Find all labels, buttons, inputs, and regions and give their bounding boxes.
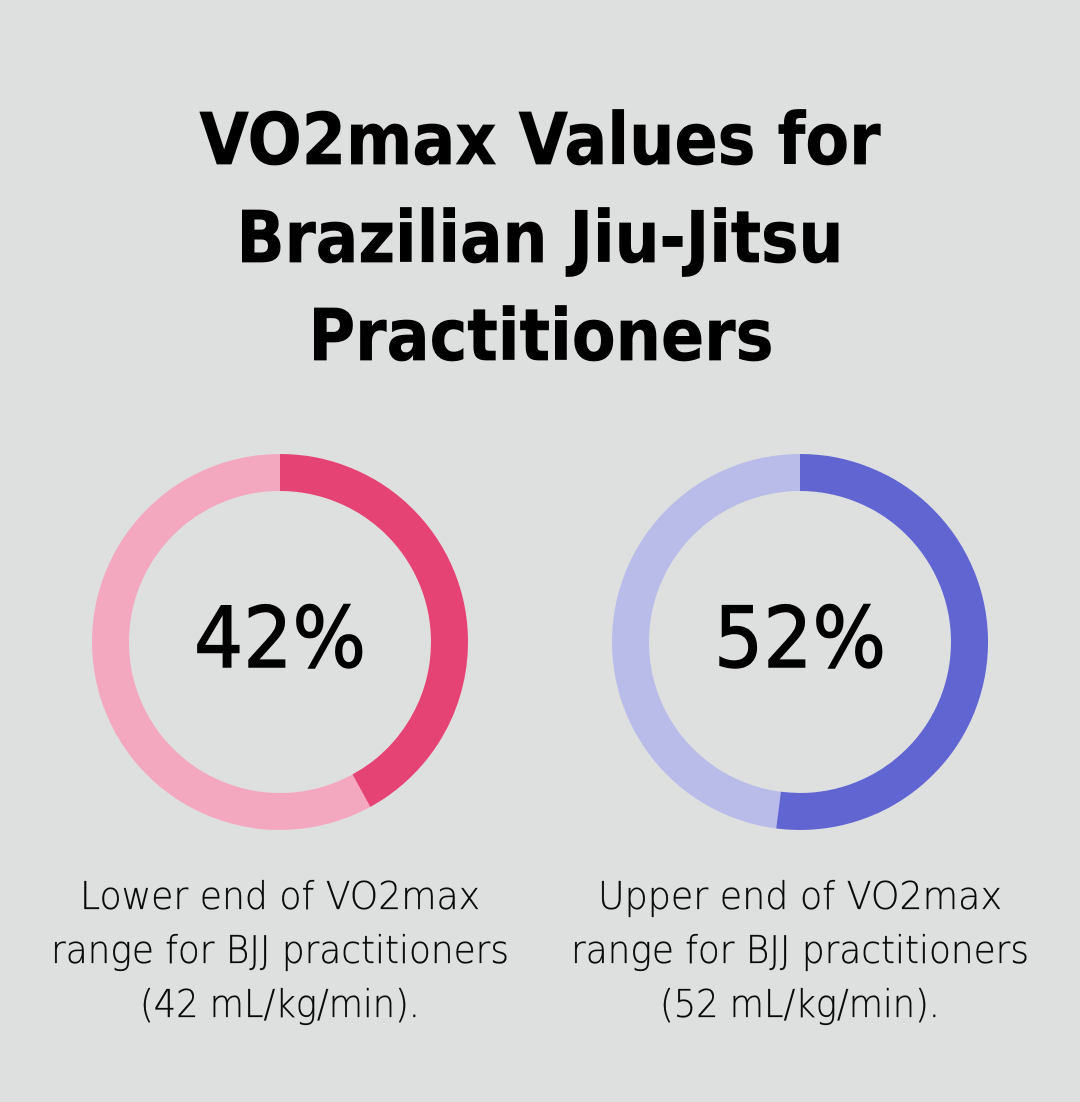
caption: lower end: (42 mL/kg/min). bbox=[140, 982, 420, 1026]
caption: upper end: range for BJJ practitioners bbox=[571, 928, 1029, 972]
caption: upper end: Upper end of VO2max bbox=[598, 874, 1002, 918]
caption: lower end: range for BJJ practitioners bbox=[51, 928, 509, 972]
title: Brazilian Jiu-Jitsu bbox=[236, 196, 844, 279]
title: VO2max Values for bbox=[200, 98, 880, 181]
donut chart: 52% bbox=[612, 454, 988, 830]
caption: lower end bbox=[51, 874, 509, 1026]
caption: upper end bbox=[571, 874, 1029, 1026]
donut chart: 52%: 52% bbox=[714, 589, 886, 687]
title: Practitioners bbox=[308, 294, 774, 377]
donut chart: 42% bbox=[92, 454, 468, 830]
caption: lower end: Lower end of VO2max bbox=[80, 874, 480, 918]
caption: upper end: (52 mL/kg/min). bbox=[660, 982, 940, 1026]
donut chart: 42%: 42% bbox=[194, 589, 366, 687]
title bbox=[199, 98, 881, 377]
